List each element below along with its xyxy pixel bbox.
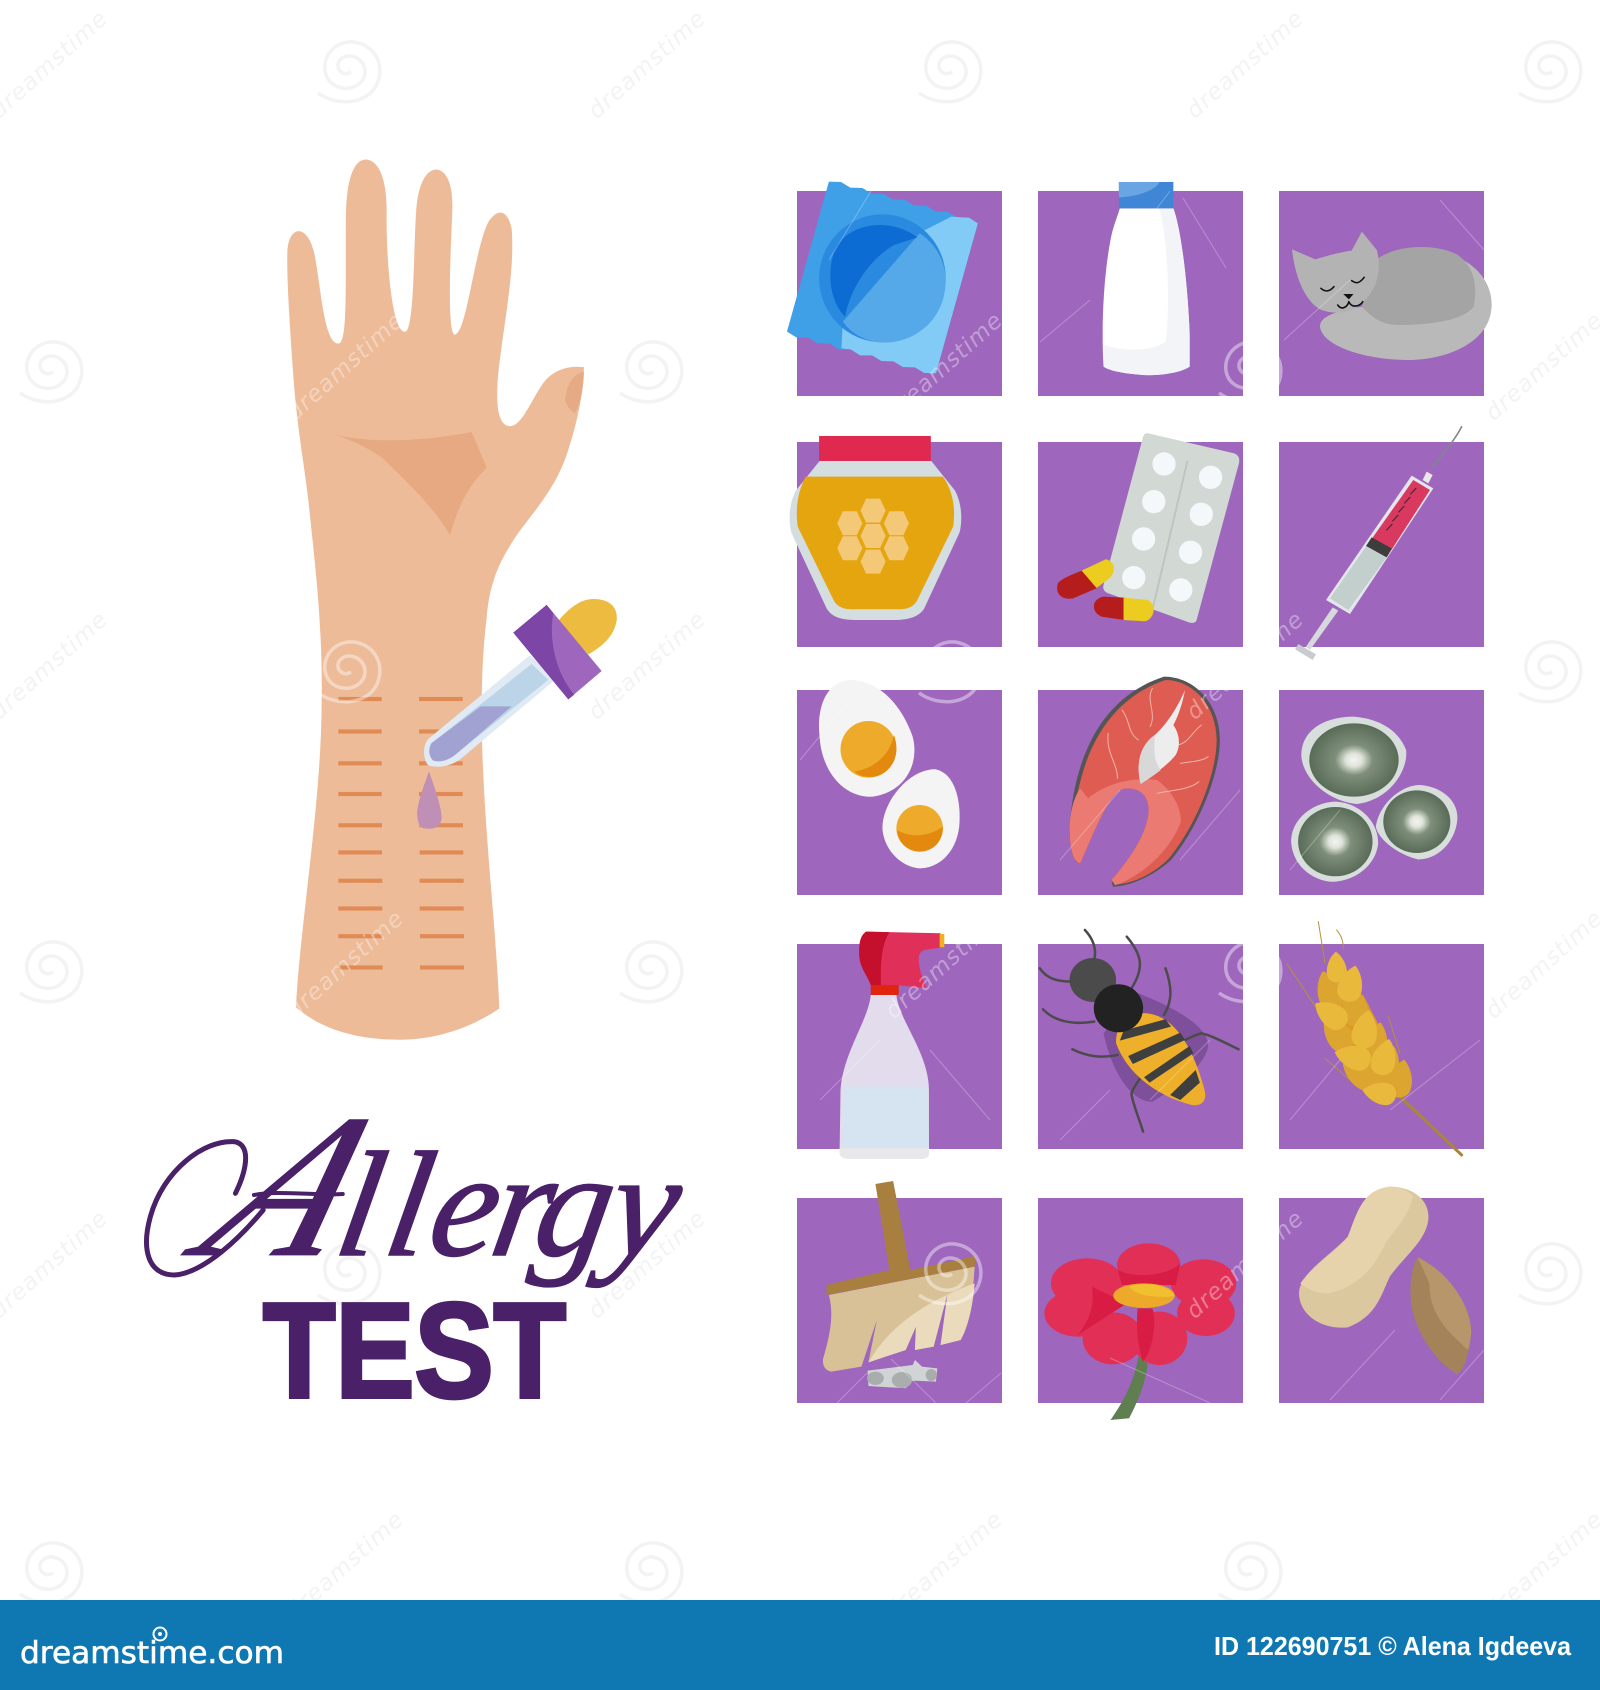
- watermark overlay on tiles and arm: [281, 191, 1484, 1403]
- palm crease: [337, 432, 487, 535]
- illustration: arm allergy skin test: [287, 159, 617, 1040]
- faint watermark on white background: dreamstime: [583, 606, 711, 725]
- bold word TEST: TEST: [263, 1275, 566, 1426]
- faint watermark on white background: dreamstime: [583, 1205, 711, 1324]
- footer logo: dreamstime.com: [20, 1636, 284, 1671]
- footer credit: ID 122690751 © Alena Igdeeva: [1214, 1631, 1572, 1661]
- tile: milk bottle: [1038, 182, 1243, 396]
- tile: honey jar: [790, 436, 1002, 647]
- script word Allergy: r: [481, 1121, 570, 1288]
- watermark overlay on tiles and arm: dreamstime: [281, 905, 409, 1024]
- tile: spray bottle: [797, 932, 1002, 1159]
- tile: latex condom packet: [787, 182, 1002, 396]
- faint watermark on white background: dreamstime: [1181, 5, 1309, 124]
- tile: syringe: [1279, 427, 1484, 660]
- tile: broom and dust: [797, 1181, 1002, 1403]
- tile: bee: [1038, 930, 1243, 1149]
- script word Allergy: A: [151, 1072, 437, 1300]
- tile: boiled eggs: [797, 680, 1002, 895]
- dropper pipette: [424, 599, 617, 767]
- script word Allergy: e: [419, 1121, 515, 1288]
- script word Allergy: [147, 1072, 695, 1300]
- thumb nail: [565, 372, 584, 413]
- watermark overlay on tiles and arm: dreamstime: [1181, 1205, 1309, 1324]
- footer band: [0, 1600, 1600, 1690]
- watermark overlay on tiles and arm: dreamstime: [880, 307, 1008, 426]
- tile: peanut and seed: [1279, 1187, 1484, 1403]
- tile: sleeping cat: [1279, 191, 1492, 396]
- tile: wheat ear: [1279, 922, 1484, 1155]
- scratch test marks: [338, 697, 464, 970]
- tile: red flower: [1038, 1198, 1243, 1420]
- script word Allergy: g: [524, 1121, 629, 1288]
- watermark overlay on tiles and arm: dreamstime: [281, 307, 409, 426]
- tile: pills blister: [1038, 433, 1243, 647]
- tile: mold spores: [1279, 690, 1484, 895]
- script word Allergy: l: [326, 1121, 397, 1288]
- watermark overlay on tiles and arm: dreamstime: [1181, 606, 1309, 725]
- allergen icon grid: [787, 182, 1492, 1420]
- watermark overlay on tiles and arm: dreamstime: [880, 905, 1008, 1024]
- arm and hand: [287, 159, 584, 1040]
- script word Allergy: y: [585, 1121, 695, 1288]
- tile: salmon steak: [1038, 677, 1243, 895]
- allergen drop: [417, 771, 442, 829]
- script word Allergy: l: [375, 1121, 446, 1288]
- faint watermark on white background: dreamstime: [880, 1506, 1008, 1625]
- title: Allergy TEST: [147, 1072, 695, 1426]
- faint watermark on white background: dreamstime: [281, 1506, 409, 1625]
- faint watermark on white background: dreamstime: [583, 5, 711, 124]
